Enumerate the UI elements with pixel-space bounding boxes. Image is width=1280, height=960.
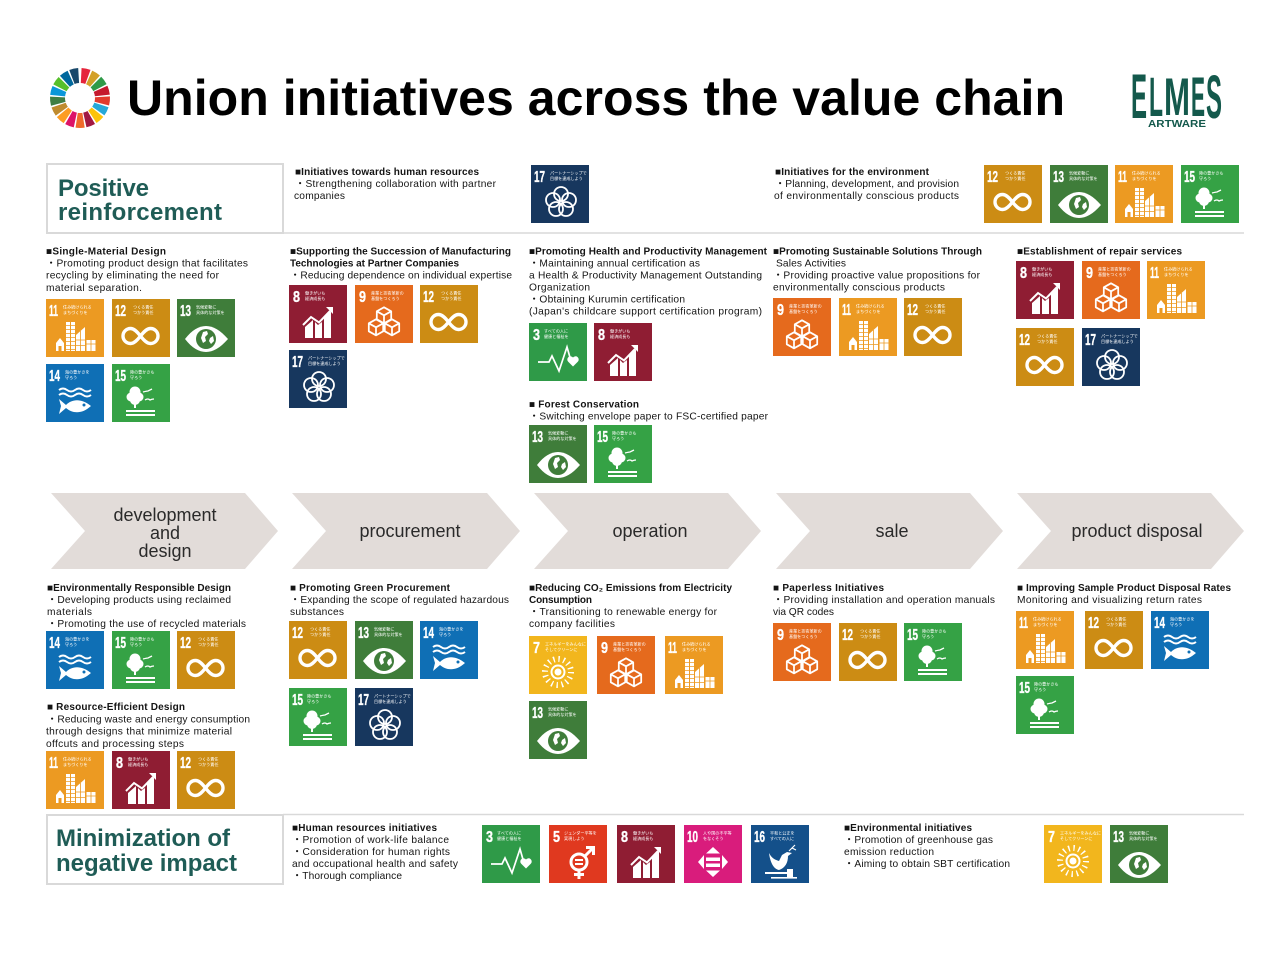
panel: human resources initiatives: 実現しよう [564, 835, 584, 841]
panel: resource-efficient design: ■ Resource-Efficient Design [47, 702, 185, 713]
panel: resource-efficient design: 12 [180, 755, 191, 772]
panel: health and productivity management: a Health & Productivity Management Outstanding [529, 270, 762, 282]
panel: positive reinforcement heading box: Positive [58, 175, 149, 202]
panel: resource-efficient design: 11 [49, 755, 58, 772]
panel: green procurement: パートナーシップで [374, 693, 411, 699]
panel: health and productivity management: ・Obtaining Kurumin certification [529, 294, 685, 306]
panel: environmentally responsible design: ■Environmentally Responsible Design [47, 583, 231, 594]
panel: human resources initiatives: をなくそう [703, 835, 723, 841]
panel: reducing CO2 emissions: 9 [601, 640, 608, 657]
panel: succession of manufacturing technologies: 8 [293, 289, 300, 306]
panel: green procurement: 具体的な対策を [374, 631, 403, 637]
panel: repair services: 基盤をつくろう [1098, 271, 1127, 277]
panel: green procurement: 海の豊かさを [439, 626, 464, 632]
ELMES Artware logo: E [1191, 66, 1205, 129]
panel: single-material design: 11 [49, 303, 58, 320]
panel: single-material design: つかう責任 [133, 309, 153, 315]
panel: resource-efficient design [46, 702, 250, 809]
panel: repair services: 働きがいも [1032, 266, 1052, 272]
panel: resource-efficient design: 働きがいも [128, 756, 148, 762]
arrow: product disposal [1017, 493, 1244, 569]
arrow: development and design [51, 493, 278, 569]
arrow: sale [776, 493, 1003, 569]
panel: resource-efficient design: through designs that minimize material [46, 726, 232, 738]
panel: single-material design: 気候変動に [196, 304, 216, 310]
panel: green procurement: 13 [358, 625, 369, 642]
ELMES Artware logo: M [1164, 68, 1190, 128]
panel: reducing CO2 emissions [529, 583, 732, 759]
panel: repair services: ■Establishment of repair services [1017, 246, 1182, 258]
panel: sustainable solutions: つかう責任 [925, 308, 945, 314]
panel: human resources initiatives: ・Promotion of work-life balance [292, 835, 449, 846]
panel: succession of manufacturing technologies: 経済成長も [305, 295, 325, 301]
panel: green procurement: つかう責任 [310, 631, 330, 637]
panel: succession of manufacturing technologies: ■Supporting the Succession of Manufacturing [290, 246, 511, 258]
panel: environmentally responsible design: materials [47, 607, 92, 618]
panel: paperless initiatives: ■ Paperless Initiatives [773, 583, 884, 594]
panel: sustainable solutions: environmentally conscious products [773, 282, 945, 294]
text block: initiatives towards human resources: companies [294, 191, 345, 202]
panel: human resources initiatives [292, 823, 809, 883]
panel: repair services [1016, 246, 1205, 386]
panel: human resources initiatives: ジェンダー平等を [564, 830, 597, 836]
panel: resource-efficient design: まちづくりを [63, 761, 88, 767]
arrow: procurement [292, 493, 520, 569]
panel: environmental initiatives: ・Aiming to obtain SBT certification [844, 859, 1010, 870]
panel: reducing CO2 emissions: ・Transitioning to renewable energy for [529, 607, 718, 618]
panel: repair services: まちづくりを [1164, 271, 1189, 277]
panel: succession of manufacturing technologies: つかう責任 [441, 295, 461, 301]
icon row: environment SDGs: 具体的な対策を [1069, 175, 1098, 181]
panel: green procurement: 17 [358, 692, 369, 709]
panel: sample product disposal rates: 守ろう [1034, 686, 1046, 692]
panel: forest conservation: 13 [532, 429, 543, 446]
panel: green procurement: つくる責任 [310, 626, 330, 632]
panel: single-material design: 海の豊かさを [65, 369, 90, 375]
text block: initiatives for the environment: ■Initiatives for the environment [775, 167, 930, 178]
panel: sustainable solutions: 11 [842, 302, 851, 319]
icon row: environment SDGs: 15 [1184, 169, 1195, 186]
panel: forest conservation: 気候変動に [548, 430, 568, 436]
panel: health and productivity management: 働きがいも [610, 328, 630, 334]
panel: repair services: パートナーシップで [1101, 333, 1138, 339]
arrow: development and design: and [150, 523, 180, 543]
panel: sustainable solutions: 住み続けられる [856, 303, 885, 309]
panel: reducing CO2 emissions: 気候変動に [548, 706, 568, 712]
panel: single-material design: 住み続けられる [63, 304, 92, 310]
panel: reducing CO2 emissions: 11 [668, 640, 677, 657]
panel: single-material design: 14 [49, 368, 60, 385]
panel: succession of manufacturing technologies: 基盤をつくろう [371, 295, 400, 301]
panel: paperless initiatives: 陸の豊かさも [922, 628, 947, 634]
panel: minimization of negative impact heading box: Minimization of [56, 825, 231, 852]
panel: succession of manufacturing technologies: ・Reducing dependence on individual expertise [290, 270, 512, 282]
panel: human resources initiatives: 10 [687, 829, 698, 846]
panel: paperless initiatives: 守ろう [922, 633, 934, 639]
panel: health and productivity management: 健康と福祉を [544, 333, 569, 339]
panel: single-material design: 陸の豊かさも [130, 369, 155, 375]
panel: human resources initiatives: すべての人に [770, 836, 794, 841]
panel: environmentally responsible design: 陸の豊かさも [130, 636, 155, 642]
text block: initiatives for the environment: ・Planning, development, and provision [775, 179, 959, 190]
panel: green procurement: 守ろう [439, 631, 451, 637]
arrow: procurement: procurement [359, 521, 461, 541]
ELMES Artware logo: ARTWARE [1148, 118, 1206, 130]
panel: repair services: 目標を達成しよう [1101, 338, 1134, 344]
icon: SDG 17: 17 [534, 169, 545, 186]
panel: green procurement: ■ Promoting Green Procurement [290, 583, 451, 594]
panel: single-material design: 具体的な対策を [196, 309, 225, 315]
panel: single-material design: ■Single-Material Design [46, 246, 166, 258]
panel: sample product disposal rates: 海の豊かさを [1170, 616, 1195, 622]
text block: initiatives for the environment [774, 167, 959, 202]
panel: human resources initiatives: 平和と公正を [770, 830, 795, 836]
panel: repair services: 経済成長も [1032, 271, 1052, 277]
panel: single-material design: ・Promoting product design that facilitates [46, 258, 248, 270]
icon row: environment SDGs: まちづくりを [1132, 175, 1157, 181]
icon row: environment SDGs: 11 [1118, 169, 1127, 186]
panel: sustainable solutions: 12 [907, 302, 918, 319]
panel: resource-efficient design: offcuts and processing steps [46, 739, 184, 750]
panel: environmental initiatives: 13 [1113, 829, 1124, 846]
panel: green procurement: 目標を達成しよう [374, 698, 407, 704]
ELMES Artware logo: E [1131, 61, 1147, 132]
panel: sample product disposal rates: まちづくりを [1033, 621, 1058, 627]
ELMES Artware logo [1131, 61, 1222, 132]
panel: single-material design: 15 [115, 368, 126, 385]
panel: repair services: 住み続けられる [1164, 266, 1193, 272]
panel: repair services: 12 [1019, 332, 1030, 349]
panel: human resources initiatives: 8 [621, 829, 628, 846]
panel: environmentally responsible design: 守ろう [130, 641, 142, 647]
icon row: environment SDGs: 守ろう [1199, 175, 1211, 181]
panel: health and productivity management: 8 [598, 327, 605, 344]
panel: resource-efficient design: 8 [116, 755, 123, 772]
panel: repair services: つかう責任 [1037, 338, 1057, 344]
panel: forest conservation: ■ Forest Conservation [529, 400, 639, 410]
panel: reducing CO2 emissions: 産業と技術革新の [613, 641, 646, 647]
panel: environmental initiatives: そしてクリーンに [1060, 835, 1092, 841]
panel: reducing CO2 emissions: company facilities [529, 619, 615, 630]
panel: environmental initiatives: 気候変動に [1129, 830, 1149, 836]
panel: health and productivity management [529, 246, 768, 381]
panel: repair services: 9 [1086, 265, 1093, 282]
panel: sample product disposal rates: 住み続けられる [1033, 616, 1062, 622]
panel: resource-efficient design: つくる責任 [198, 756, 218, 762]
panel: health and productivity management: ■Promoting Health and Productivity Management [529, 246, 768, 258]
panel: minimization of negative impact heading box [47, 814, 1244, 884]
panel: health and productivity management: 経済成長も [610, 333, 630, 339]
panel: health and productivity management: 3 [533, 327, 540, 344]
arrow: operation: operation [612, 521, 688, 541]
panel: human resources initiatives: 経済成長も [633, 835, 653, 841]
panel: repair services: つくる責任 [1037, 333, 1057, 339]
panel: environmental initiatives: エネルギーをみんなに [1060, 830, 1101, 836]
panel: sustainable solutions: 9 [777, 302, 784, 319]
panel: environmental initiatives: ■Environmental initiatives [844, 823, 972, 834]
panel: paperless initiatives: 9 [777, 627, 784, 644]
panel: single-material design: 12 [115, 303, 126, 320]
panel: sample product disposal rates: 15 [1019, 680, 1030, 697]
panel: sample product disposal rates: つかう責任 [1106, 621, 1126, 627]
panel: green procurement: ・Expanding the scope of regulated hazardous [290, 595, 509, 606]
icon row: environment SDGs: 陸の豊かさも [1199, 170, 1224, 176]
panel: human resources initiatives: ・Thorough compliance [292, 871, 402, 882]
panel: single-material design: 13 [180, 303, 191, 320]
panel: single-material design: まちづくりを [63, 309, 88, 315]
panel: single-material design: material separation. [46, 283, 142, 294]
panel: succession of manufacturing technologies: つくる責任 [441, 290, 461, 296]
panel: sample product disposal rates: 守ろう [1170, 621, 1182, 627]
panel: resource-efficient design: 経済成長も [128, 761, 148, 767]
panel: reducing CO2 emissions: エネルギーをみんなに [545, 641, 586, 647]
panel: environmentally responsible design: つかう責任 [198, 641, 218, 647]
panel: sustainable solutions: ・Providing proactive value propositions for [773, 270, 981, 282]
panel: environmentally responsible design [46, 583, 246, 689]
panel: forest conservation: 守ろう [612, 435, 624, 441]
panel: human resources initiatives: 健康と福祉を [497, 835, 522, 841]
panel: succession of manufacturing technologies: Technologies at Partner Companies [290, 258, 459, 270]
panel: repair services: 産業と技術革新の [1098, 266, 1131, 272]
panel: environmentally responsible design: ・Promoting the use of recycled materials [47, 619, 246, 630]
panel: green procurement [289, 583, 509, 746]
panel: paperless initiatives: 産業と技術革新の [789, 628, 822, 634]
panel: paperless initiatives [773, 583, 995, 681]
panel: green procurement: 守ろう [307, 698, 319, 704]
panel: paperless initiatives: 基盤をつくろう [789, 633, 818, 639]
SDG wheel logo [48, 66, 112, 130]
panel: succession of manufacturing technologies: パートナーシップで [308, 355, 345, 361]
panel: sustainable solutions: まちづくりを [856, 308, 881, 314]
panel: paperless initiatives: ・Providing installation and operation manuals [773, 595, 995, 606]
panel: environmentally responsible design: ・Developing products using reclaimed [47, 595, 231, 606]
panel: resource-efficient design: ・Reducing waste and energy consumption [47, 714, 250, 726]
icon row: environment SDGs: 13 [1053, 169, 1064, 186]
panel: repair services: 11 [1150, 265, 1159, 282]
panel: human resources initiatives: 働きがいも [633, 830, 653, 836]
panel: repair services: 17 [1085, 332, 1096, 349]
panel: sample product disposal rates [1016, 583, 1231, 734]
panel: repair services: 8 [1020, 265, 1027, 282]
title: Union initiatives across the value chain [127, 70, 1065, 126]
panel: green procurement: 陸の豊かさも [307, 693, 332, 699]
panel: forest conservation: 15 [597, 429, 608, 446]
panel: sustainable solutions: ■Promoting Sustainable Solutions Through [773, 246, 982, 258]
panel: green procurement: 12 [292, 625, 303, 642]
panel: human resources initiatives: ・Consideration for human rights [292, 847, 450, 858]
panel: single-material design [46, 246, 248, 422]
panel: positive reinforcement heading box: reinforcement [58, 199, 222, 226]
panel: human resources initiatives: 16 [754, 829, 765, 846]
panel: human resources initiatives: 5 [553, 829, 560, 846]
icon row: environment SDGs: つかう責任 [1005, 175, 1025, 181]
panel: sample product disposal rates: つくる責任 [1106, 616, 1126, 622]
panel: reducing CO2 emissions: そしてクリーンに [545, 646, 577, 652]
panel: succession of manufacturing technologies: 目標を達成しよう [308, 360, 341, 366]
panel: environmental initiatives: emission reduction [844, 847, 934, 858]
panel: sample product disposal rates: Monitoring and visualizing return rates [1017, 595, 1202, 606]
panel: forest conservation: ・Switching envelope paper to FSC-certified paper [529, 412, 769, 422]
panel: reducing CO2 emissions: ■Reducing CO₂ Emissions from Electricity [529, 583, 732, 594]
ELMES Artware logo: S [1206, 64, 1222, 132]
panel: succession of manufacturing technologies: 産業と技術革新の [371, 290, 404, 296]
icon row: environment SDGs: 気候変動に [1069, 170, 1089, 176]
panel: succession of manufacturing technologies [289, 246, 512, 408]
panel: succession of manufacturing technologies: 働きがいも [305, 290, 325, 296]
panel: single-material design: 守ろう [65, 374, 77, 380]
panel: sample product disposal rates: 11 [1019, 615, 1028, 632]
panel: health and productivity management: ・Maintaining annual certification as [529, 258, 700, 270]
panel: positive reinforcement heading box [47, 164, 1244, 233]
panel: green procurement: 気候変動に [374, 626, 394, 632]
icon row: environment SDGs: 12 [987, 169, 998, 186]
icon: SDG 17 [531, 165, 589, 223]
icon row: environment SDGs: 住み続けられる [1132, 170, 1161, 176]
panel: reducing CO2 emissions: 住み続けられる [682, 641, 711, 647]
panel: reducing CO2 emissions: まちづくりを [682, 646, 707, 652]
panel: environmental initiatives: 具体的な対策を [1129, 835, 1158, 841]
panel: single-material design: recycling by eliminating the need for [46, 270, 220, 282]
panel: sustainable solutions [773, 246, 982, 356]
panel: resource-efficient design: つかう責任 [198, 761, 218, 767]
panel: environmentally responsible design: 守ろう [65, 641, 77, 647]
panel: sustainable solutions: Sales Activities [776, 258, 846, 270]
arrow: sale: sale [875, 521, 909, 541]
icon: SDG 17: パートナーシップで [550, 170, 587, 176]
panel: health and productivity management: Organization [529, 282, 590, 294]
panel: paperless initiatives: 12 [842, 627, 853, 644]
panel: single-material design: つくる責任 [133, 304, 153, 310]
panel: environmental initiatives: ・Promotion of greenhouse gas [844, 835, 993, 846]
panel: environmentally responsible design: 海の豊かさを [65, 636, 90, 642]
panel: paperless initiatives: つかう責任 [860, 633, 880, 639]
panel: sample product disposal rates: ■ Improving Sample Product Disposal Rates [1017, 583, 1231, 594]
text block: initiatives towards human resources: ・Strengthening collaboration with partner [295, 179, 497, 190]
panel: succession of manufacturing technologies: 12 [423, 289, 434, 306]
panel: sustainable solutions: 産業と技術革新の [789, 303, 822, 309]
panel: environmental initiatives: 7 [1048, 829, 1055, 846]
panel: forest conservation [529, 400, 769, 483]
text block: initiatives towards human resources: ■Initiatives towards human resources [295, 167, 479, 178]
panel: paperless initiatives: つくる責任 [860, 628, 880, 634]
panel: green procurement: substances [290, 607, 344, 618]
icon row: environment SDGs [984, 165, 1239, 223]
panel: sustainable solutions: 基盤をつくろう [789, 308, 818, 314]
icon row: environment SDGs: つくる責任 [1005, 170, 1025, 176]
panel: sustainable solutions: つくる責任 [925, 303, 945, 309]
panel: health and productivity management: (Japan's childcare support certification program) [529, 306, 762, 318]
panel: sample product disposal rates: 14 [1154, 615, 1165, 632]
panel: forest conservation: 具体的な対策を [548, 435, 577, 441]
text block: initiatives for the environment: of environmentally conscious products [774, 191, 959, 202]
panel: single-material design: 守ろう [130, 374, 142, 380]
panel: human resources initiatives: 3 [486, 829, 493, 846]
text block: initiatives towards human resources [294, 167, 497, 202]
panel: minimization of negative impact heading box: negative impact [56, 850, 237, 877]
icon: SDG 17: 目標を達成しよう [550, 175, 583, 181]
panel: human resources initiatives: and occupational health and safety [292, 859, 459, 870]
panel: succession of manufacturing technologies: 17 [292, 354, 303, 371]
panel: sample product disposal rates: 陸の豊かさも [1034, 681, 1059, 687]
panel: environmentally responsible design: 15 [115, 635, 126, 652]
panel: forest conservation: 陸の豊かさも [612, 430, 637, 436]
arrow: operation [534, 493, 761, 569]
panel: health and productivity management: すべての人に [544, 329, 568, 334]
panel: reducing CO2 emissions: 具体的な対策を [548, 711, 577, 717]
panel: green procurement: 14 [423, 625, 434, 642]
panel: environmental initiatives [844, 823, 1168, 883]
arrow: development and design: design [138, 541, 192, 561]
panel: environmentally responsible design: つくる責任 [198, 636, 218, 642]
panel: reducing CO2 emissions: Consumption [529, 595, 592, 606]
arrow: development and design: development [113, 505, 217, 525]
panel: green procurement: 15 [292, 692, 303, 709]
panel: human resources initiatives: ■Human resources initiatives [292, 823, 437, 834]
panel: paperless initiatives: via QR codes [773, 607, 834, 618]
panel: reducing CO2 emissions: 基盤をつくろう [613, 646, 642, 652]
ELMES Artware logo: L [1149, 66, 1163, 129]
arrow: product disposal: product disposal [1071, 521, 1203, 541]
panel: environmentally responsible design: 14 [49, 635, 60, 652]
panel: environmentally responsible design: 12 [180, 635, 191, 652]
panel: paperless initiatives: 15 [907, 627, 918, 644]
panel: succession of manufacturing technologies: 9 [359, 289, 366, 306]
panel: reducing CO2 emissions: 7 [533, 640, 540, 657]
panel: human resources initiatives: 人や国の不平等 [703, 830, 732, 836]
panel: sample product disposal rates: 12 [1088, 615, 1099, 632]
panel: human resources initiatives: すべての人に [497, 831, 521, 836]
panel: resource-efficient design: 住み続けられる [63, 756, 92, 762]
panel: reducing CO2 emissions: 13 [532, 705, 543, 722]
